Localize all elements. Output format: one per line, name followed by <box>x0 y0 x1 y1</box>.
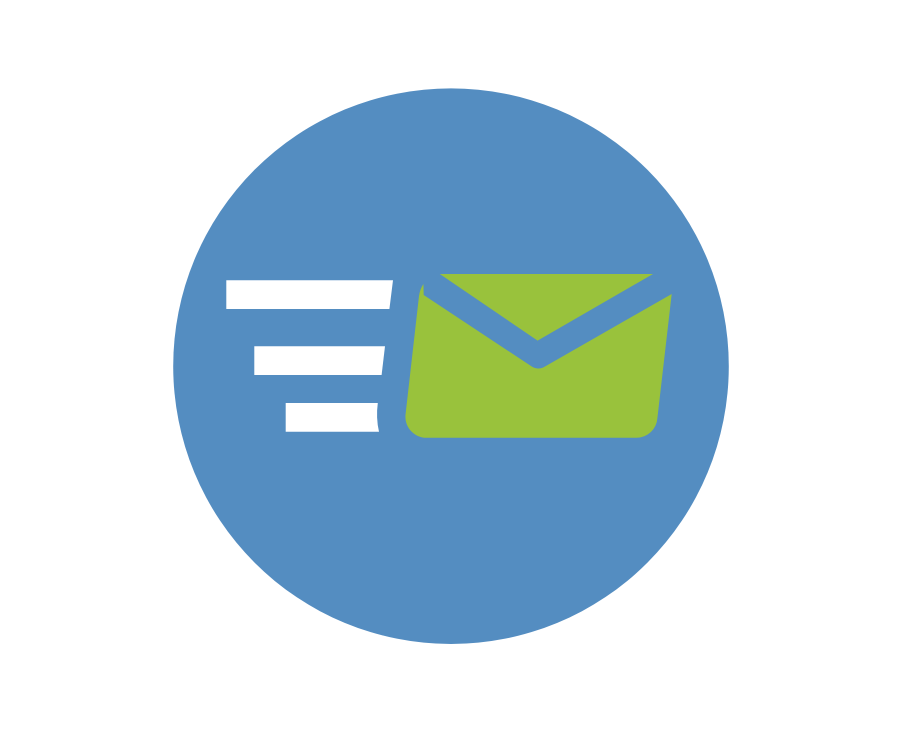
icon: speed lines <box>226 280 393 432</box>
icon: email with speed lines <box>226 274 672 438</box>
speed line: middle <box>254 346 385 375</box>
speed line: top <box>226 280 393 309</box>
envelope flap <box>440 274 653 341</box>
envelope body <box>405 284 672 438</box>
speed line: bottom <box>286 403 379 432</box>
panel: blue circle background <box>173 88 729 644</box>
icon: envelope <box>405 274 672 438</box>
